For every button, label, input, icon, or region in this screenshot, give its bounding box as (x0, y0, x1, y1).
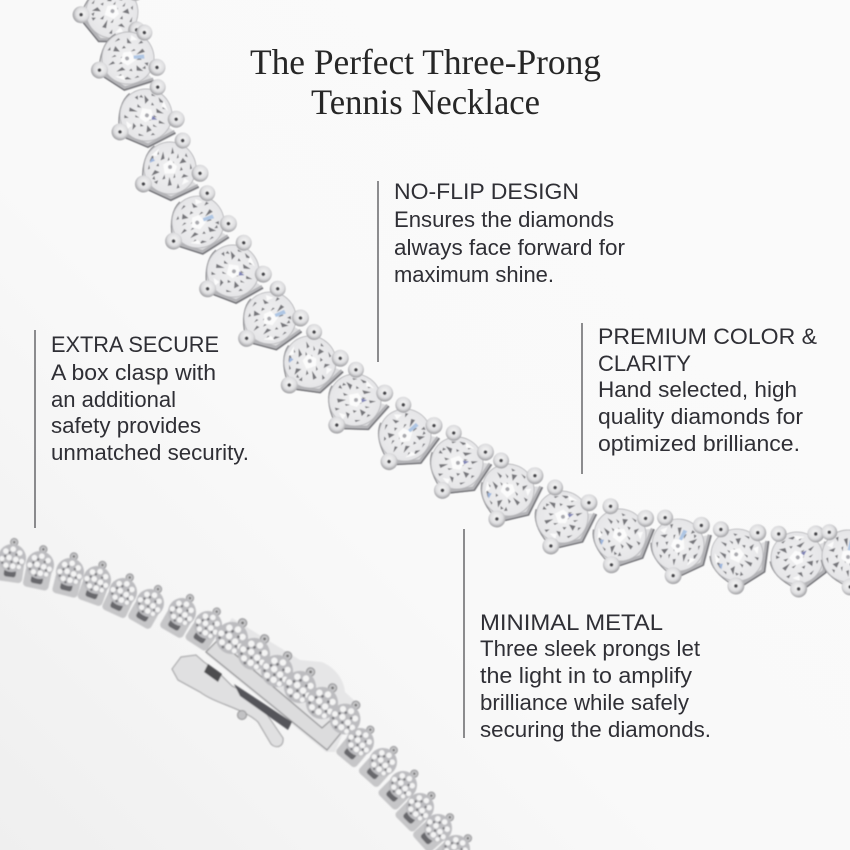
callout: premium color and clarity: CLARITY (598, 351, 691, 376)
bracelet: small diamond chain with box clasp (0, 537, 480, 850)
callout: no-flip design: NO-FLIP DESIGN (394, 179, 579, 204)
callout: extra secure (35, 330, 249, 528)
title: Tennis Necklace (311, 82, 540, 122)
callout: no-flip design (378, 179, 625, 362)
necklace: three-prong diamond chain (70, 0, 850, 599)
callout: minimal metal: brilliance while safely (480, 690, 689, 715)
callout: minimal metal: securing the diamonds. (480, 717, 711, 742)
callout: minimal metal: the light in to amplify (480, 663, 692, 688)
callout: no-flip design: Ensures the diamonds (394, 207, 614, 232)
callout: no-flip design: maximum shine. (394, 262, 554, 287)
box clasp body (172, 618, 356, 752)
callout: extra secure: EXTRA SECURE (51, 332, 219, 357)
callout: minimal metal: MINIMAL METAL (480, 610, 663, 635)
title: The Perfect Three-Prong (250, 42, 601, 82)
callout: premium color and clarity: Hand selected, high (598, 377, 797, 402)
title (250, 42, 601, 122)
callout: extra secure: A box clasp with (51, 360, 216, 385)
callout: extra secure: safety provides (51, 413, 201, 438)
callout: premium color and clarity: quality diamonds for (598, 404, 803, 429)
callout: minimal metal (464, 529, 711, 742)
callout: premium color and clarity (582, 323, 817, 474)
callout: extra secure: an additional (51, 387, 176, 412)
callout: premium color and clarity: PREMIUM COLOR & (598, 324, 817, 349)
callout: no-flip design: always face forward for (394, 235, 625, 260)
callout: extra secure: unmatched security. (51, 440, 249, 465)
callout: premium color and clarity: optimized brilliance. (598, 431, 800, 456)
callout: minimal metal: Three sleek prongs let (480, 636, 700, 661)
